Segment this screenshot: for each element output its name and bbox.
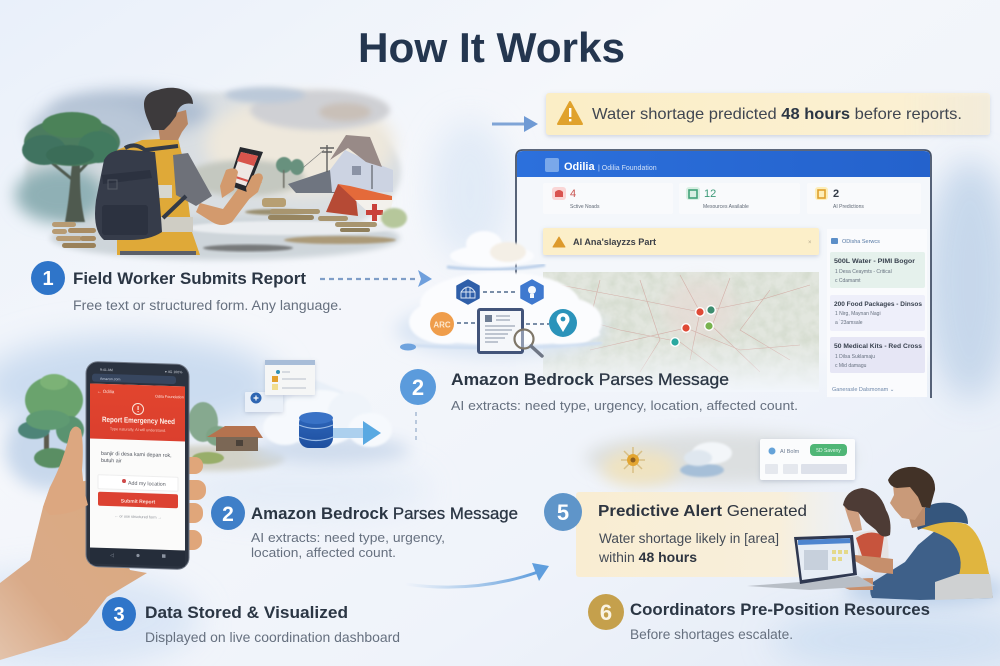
phone: report emergency form: ▾ 4G 100% [165,370,182,374]
woman [843,488,890,565]
step 2 lower: bedrock parses message [211,496,518,560]
step 3: data stored: Displayed on live coordination dashboard [145,630,400,645]
resource card: food: a `23amsale [835,320,863,326]
resource card: medical [830,337,925,373]
step 6: coordinators pre-position [588,594,930,642]
icon: ARC badge [430,312,454,336]
resource card: medical: c Mid damagu [835,363,867,369]
icon: database [299,412,333,448]
dashed connector [415,412,417,444]
dashboard header: Odilia [564,161,595,173]
map pins [670,305,716,347]
step 2 upper: bedrock parses message: 2 [412,375,424,400]
tree right [188,402,230,464]
phone navigation bar [90,547,185,566]
AI mini card: 5D Saveny [816,448,841,454]
backpack [95,145,186,240]
step 5: predictive alert card [544,492,866,578]
step 2 lower: bedrock parses message: 2 [222,503,234,526]
phone in hand [228,147,263,192]
tree [22,112,120,222]
icon: location pin [549,309,577,337]
cloud parsing illustration [395,231,605,358]
small trees [276,157,304,188]
AI analysis bar [543,228,819,255]
stat card: active needs: Sctive Noads [570,204,600,210]
head [157,110,188,140]
AI mini card [760,439,855,480]
step 2 lower: bedrock parses message: Amazon Bedrock Parses Message [251,505,518,523]
step 1: field worker submits report [31,261,342,313]
dashboard window [516,150,931,400]
resource card: medical: 1 Dilsa Suklamaju [835,354,875,360]
map [543,272,819,392]
resource card: food [830,295,925,331]
resources side panel: ODisha Serwcs [842,239,880,245]
phone: report emergency form [86,361,189,570]
red header [90,383,185,441]
stat card: predictions [807,183,921,214]
arrow to cloud [333,421,381,445]
step 2 upper: bedrock parses message: AI extracts: need type, urgency, location, affected count. [451,398,798,413]
sandbags left [52,222,96,248]
resource card: water: c Cdamamt [835,278,861,284]
stat card: active needs: 4 [570,188,576,200]
icon: sun [621,447,645,473]
icon: document with magnifier [477,308,542,356]
step 5: predictive alert card: Predictive Alert Generated [598,503,807,520]
resource card: water: 1 Desa Ceaymts - Critical [835,269,892,275]
red header: Odila Foundation [155,395,184,399]
stat card: resources: 12 [704,188,716,200]
icon: ARC badge: ARC [433,320,451,330]
step 3: data stored: Data Stored & Visualized [145,604,348,622]
sandbags right [262,198,377,232]
red header: Type naturally, AI will understand. [110,427,166,433]
house [207,426,263,451]
alert banner: Water shortage predicted 48 hours before reports. [592,106,962,123]
resource card: water [830,252,925,288]
submit button: Submit Report [121,498,156,506]
stat card: active needs [543,183,673,214]
cloud [263,380,392,447]
phone: report emergency form: 9:41 AM [100,368,113,372]
stat card: predictions: 2 [833,188,839,200]
step 6: coordinators pre-position: 6 [600,600,612,625]
step 6: coordinators pre-position: Coordinators Pre-Position Resources [630,601,930,619]
icon: rain cloud [680,442,732,477]
relief tent [326,184,393,223]
resource card: medical: 50 Medical Kits - Red Cross [834,344,923,350]
step 1: field worker submits report: Free text or structured form. Any language. [73,298,342,313]
title: How It Works [358,24,625,71]
location field [98,475,178,491]
watercolor backdrop [15,87,401,260]
laptop [747,535,875,590]
icon: lightbulb hexagon [521,280,543,304]
AI analysis bar: × [808,240,812,246]
man [840,467,993,600]
submit button [98,492,178,508]
weather illustration [602,442,732,486]
card windows [245,360,315,412]
step 6: coordinators pre-position: Before shortages escalate. [630,627,793,642]
stat card: resources [679,183,800,214]
stat card: resources: Mesources Available [703,204,749,210]
location field: Add my location [128,481,166,488]
resources side panel: Ganerasle Dalsmonam ⌄ [832,387,894,393]
curved flow arrow [405,563,549,587]
step 1: field worker submits report: Field Worker Submits Report [73,269,306,288]
step 1: field worker submits report: 1 [42,268,54,290]
tree left [18,374,84,468]
AI analysis bar: AI Ana'slayzzs Part [573,237,656,247]
message input [101,451,172,466]
illustration: village scene behind phone [5,360,410,490]
resource card: food: 200 Food Packages - Dinsos [834,302,923,308]
step 5: predictive alert card: within 48 hours [598,550,697,565]
AI mini card: AI Bolm [780,449,800,455]
arrow: step 1 to cloud [320,270,432,287]
alert banner [546,93,990,135]
red header: Report Emergency Need [102,415,175,426]
step 2 lower: bedrock parses message: location, affected count. [251,545,396,560]
step 2 lower: bedrock parses message: AI extracts: need type, urgency, [251,530,445,545]
resource card: food: 1 Nirg, Maynan Nagi [835,311,881,317]
phone navigation bar: ◁ [110,553,114,559]
house [288,135,393,193]
step 5: predictive alert card: 5 [557,500,569,525]
arm and sleeve [196,178,262,225]
resources side panel [827,229,927,397]
step 3: data stored [102,597,400,645]
red header: ← Odilia [97,389,115,394]
vest [117,138,200,255]
dashboard header: | Odilia Foundation [598,165,657,172]
illustration: coordinators with laptop [747,467,1000,606]
stat card: predictions: AI Predictions [833,204,864,210]
phone: report emergency form: ← or use structured form → [115,514,162,520]
hand holding phone: wrist, palm and fingers behind phone [0,457,206,660]
message input: butuh air [101,458,122,464]
hand: thumb over phone [43,426,88,515]
illustration: field worker in flood scene [15,87,407,260]
step 2 upper: bedrock parses message [400,369,798,413]
icon: warning triangle [558,102,582,124]
arrow: to alert banner [492,116,538,132]
phone: report emergency form: Amazon.com [100,377,121,381]
icon: grid hexagon [457,280,479,304]
resource card: water: 500L Water - PIMI Bogor [834,259,916,265]
step 3: data stored: 3 [113,604,125,626]
step 5: predictive alert card: Water shortage likely in [area] [599,531,779,546]
dashboard header [517,151,930,177]
step 2 upper: bedrock parses message: Amazon Bedrock Parses Message [451,370,729,389]
message input: banjir di desa kami depan rok, [101,451,172,459]
